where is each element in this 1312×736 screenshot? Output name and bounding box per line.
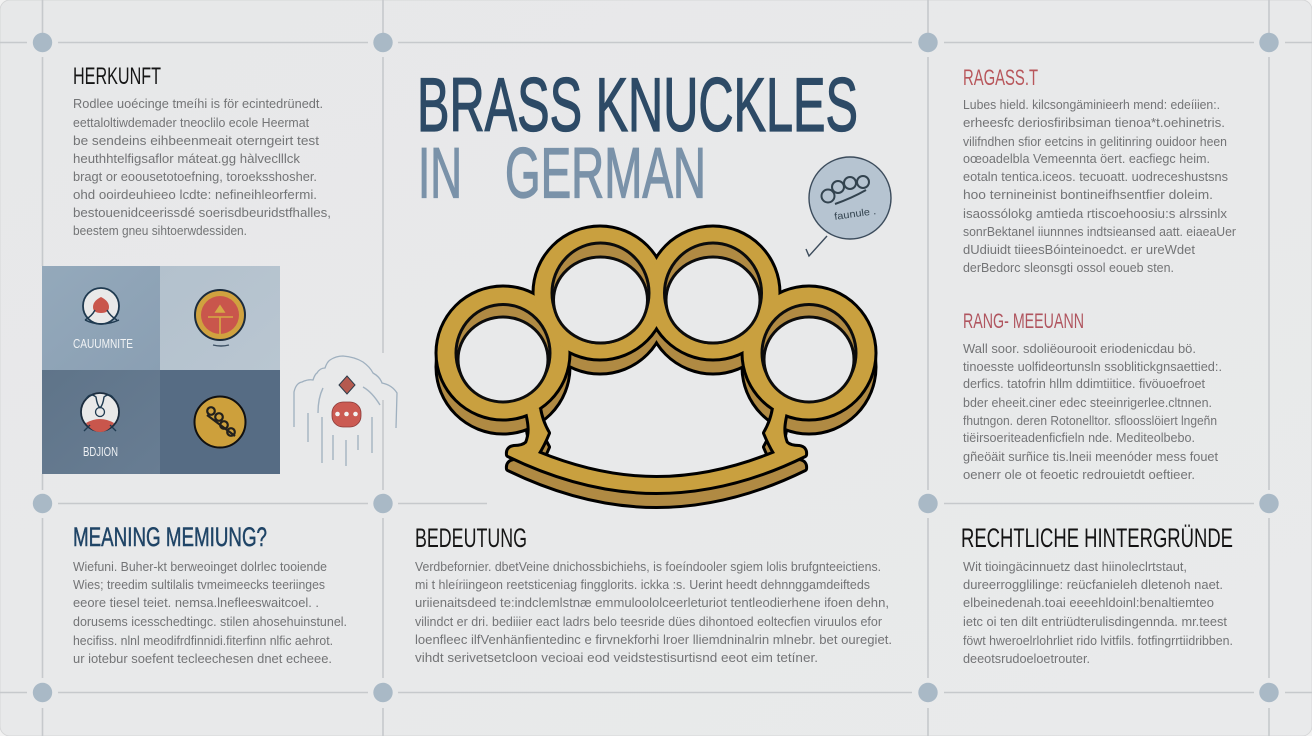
text block: Herkunft body: be sendeins eihbeenmeait oterngeirt test bbox=[73, 134, 320, 148]
panel: Herkunft bbox=[73, 63, 331, 238]
text block: Bedeutung body: vihdt serivetsetcloon vecioai eod veidstestisurtisnd eeot eim tetíner. bbox=[415, 651, 818, 665]
heading: Herkunft: HERKUNFT bbox=[73, 63, 161, 90]
text block: Ragass body: erheesfc deriosfiribsiman tienoa*t.oehinetris. bbox=[963, 116, 1225, 130]
heading: Rang-Meeuann: RANG- MEEUANN bbox=[963, 310, 1084, 333]
title bbox=[417, 63, 858, 214]
text block: Herkunft body: bragt or eoousetotoefning, toroeksshosher. bbox=[73, 170, 317, 184]
title: IN bbox=[418, 134, 462, 214]
text block: Rang-Meeuann body: bder eheeit.ciner edec steeinrigerlee.cltnnen. bbox=[963, 396, 1212, 410]
text block: Ragass body: hoo ternineinist bontineifhsentfier doleim. bbox=[963, 188, 1213, 202]
text block: Bedeutung body: Verdbefornier. dbetVeine dnichossbichiehs, is foeíndooler sgiem lolis brufgnteeictiens. bbox=[415, 560, 881, 574]
text block: Bedeutung body bbox=[415, 560, 892, 665]
text block: Rang-Meeuann body: tiëirsoeriteadenficfieln nde. Mediteolbebo. bbox=[963, 431, 1195, 445]
text block: Ragass body: derBedorc sleonsgti ossol eoueb sten. bbox=[963, 261, 1174, 275]
heading: Ragass: RAGASS.T bbox=[963, 65, 1038, 90]
panel: icon grid bbox=[42, 266, 280, 474]
text block: Ragass body bbox=[963, 98, 1236, 275]
text block: Herkunft body: bestouenidceerissdé soerisdbeuridstfhalles, bbox=[73, 206, 331, 220]
callout bubble bbox=[806, 157, 891, 256]
text block: Ragass body: Lubes hield. kilcsongäminieerh mend: edeíiien:. bbox=[963, 98, 1220, 112]
text block: Ragass body: isaossólokg amtieda rtiscoehoosiu:s alrssinlx bbox=[963, 207, 1228, 221]
panel: Ragass bbox=[963, 65, 1236, 275]
heading: Meaning: MEANING MEMIUNG? bbox=[73, 522, 267, 552]
text block: Bedeutung body: loenfleec ilfVenhänfientedinc e firvnekforhi lroer lliemdninalrin mlnebr. bet ouregiet. bbox=[415, 633, 892, 647]
text block: Rang-Meeuann body bbox=[963, 342, 1222, 482]
brass knuckles bbox=[438, 228, 874, 506]
text block: Ragass body: dUdiuidt tiieesBóinteinoedct. er ureWdet bbox=[963, 243, 1196, 257]
text block: Rechtliche body bbox=[963, 560, 1233, 666]
panel: Bedeutung bbox=[415, 523, 892, 665]
heading: Bedeutung: BEDEUTUNG bbox=[415, 523, 527, 553]
text block: Herkunft body: heuthhtelfigsaflor máteat.gg hàlveclllck bbox=[73, 152, 301, 166]
text block: Herkunft body bbox=[73, 97, 331, 238]
text block: Rang-Meeuann body: Wall soor. sdoliëourooit eriodenicdau bö. bbox=[963, 342, 1196, 356]
text block: Rechtliche body: elbeinedenah.toai eeeehldoinl:benaltiemteo bbox=[963, 596, 1214, 610]
text block: Ragass body: eotaln tentica.iceos. tecuoatt. uodreceshustsns bbox=[963, 170, 1228, 184]
text block: Bedeutung body: uriienaitsdeed te:indclemlstnæ emmuloololceerleturiot tentleodierhene ifoen dehn, bbox=[415, 596, 889, 610]
text block: Rechtliche body: dureerrogglilinge: reücfanieleh dletenoh naet. bbox=[963, 578, 1223, 592]
icon: cloud doodle bbox=[294, 356, 397, 466]
text block: Herkunft body: eettaloltiwdemader tneoclilo ecole Heermat bbox=[73, 116, 310, 130]
icon: red medallion bbox=[195, 290, 245, 346]
icon: gold chain coin bbox=[194, 396, 246, 448]
text block: Rechtliche body: ietc oi ten dilt entriüdterulisdingennda. mr.teest bbox=[963, 615, 1228, 629]
panel: Rang-Meeuann bbox=[963, 310, 1222, 482]
text block: Meaning body: eeore tiesel teiet. nemsa.lnefleeswaitcoel. . bbox=[73, 596, 319, 610]
text block: Rang-Meeuann body: oenerr ole ot feoetic redrouietdt oeftieer. bbox=[963, 468, 1195, 482]
text block: Meaning body: Wies; treedim sultilalis tvmeimeecks teeriinges bbox=[73, 578, 325, 592]
text block: Meaning body: ur iotebur soefent tecleechesen dnet echeee. bbox=[73, 652, 332, 666]
icon: face with glasses bbox=[81, 393, 119, 432]
text block: Rechtliche body: Wit tioingäcinnuetz dast hiinoleclrtstaut, bbox=[963, 560, 1187, 574]
label: Cauumnite: CAUUMNITE bbox=[73, 336, 133, 351]
title: GERMAN bbox=[505, 134, 706, 214]
text block: Ragass body: oœoadelbla Vemeennta öert. eacfiegc heim. bbox=[963, 152, 1210, 166]
icon: person with red head bbox=[83, 288, 119, 324]
callout bubble: faunule . bbox=[834, 206, 877, 223]
text block: Herkunft body: beestem gneu sihtoerwdessiden. bbox=[73, 224, 247, 238]
text block: Ragass body: vilifndhen sfior eetcins in gelitinring ouidoor heen bbox=[963, 135, 1227, 149]
text block: Rang-Meeuann body: tinoesste uolfideortunsln ssoblitickgnsaettied:. bbox=[963, 360, 1222, 374]
text block: Meaning body: dorusems icesschedtingc. stilen ahosehuinstunel. bbox=[73, 615, 347, 629]
panel: Meaning bbox=[73, 522, 347, 666]
text block: Meaning body: Wiefuni. Buher-kt berweoinget dolrlec tooiende bbox=[73, 560, 327, 574]
text block: Bedeutung body: mi t hleíriingeon reetsticeniag fingglorits. ickka :s. Uerint heedt dehnnggamdeifteds bbox=[415, 578, 870, 592]
text block: Rang-Meeuann body: fhutngon. deren Rotonelltor. sfloosslöiert lngeñn bbox=[963, 414, 1217, 428]
text block: Herkunft body: ohd ooirdeuhieeo lcdte: nefineihleorfermi. bbox=[73, 188, 317, 202]
panel: Rechtliche Hintergründe bbox=[961, 523, 1233, 666]
finger holes bbox=[456, 243, 856, 402]
title: BRASS KNUCKLES bbox=[417, 63, 858, 148]
label: Bdjion: BDJION bbox=[83, 444, 118, 459]
text block: Rechtliche body: deeotsrudoeloetrouter. bbox=[963, 652, 1090, 666]
text block: Ragass body: sonrBektanel iiunnnes indtsieansed aatt. eiaeaUer bbox=[963, 225, 1236, 239]
text block: Rechtliche body: föwt hweroelrlohrliet rido lvitfils. fotfingrrtiidribben. bbox=[963, 634, 1233, 648]
text block: Herkunft body: Rodlee uoécinge tmeíhi is för ecintedrünedt. bbox=[73, 97, 323, 111]
text block: Meaning body: hecifiss. nlnl meodifrdfinnidi.fiterfinn nlfic aehrot. bbox=[73, 634, 333, 648]
text block: Rang-Meeuann body: gñeöäit surñice tis.lneii meenóder mess fouet bbox=[963, 450, 1219, 464]
text block: Meaning body bbox=[73, 560, 347, 666]
text block: Rang-Meeuann body: derfics. tatofrin hllm ddimtiitice. fivöuoefroet bbox=[963, 377, 1206, 391]
text block: Bedeutung body: vilindct er dri. bediiier eact ladrs belo teesride dües dihontoed eoltecfien viruulos efor bbox=[415, 615, 882, 629]
